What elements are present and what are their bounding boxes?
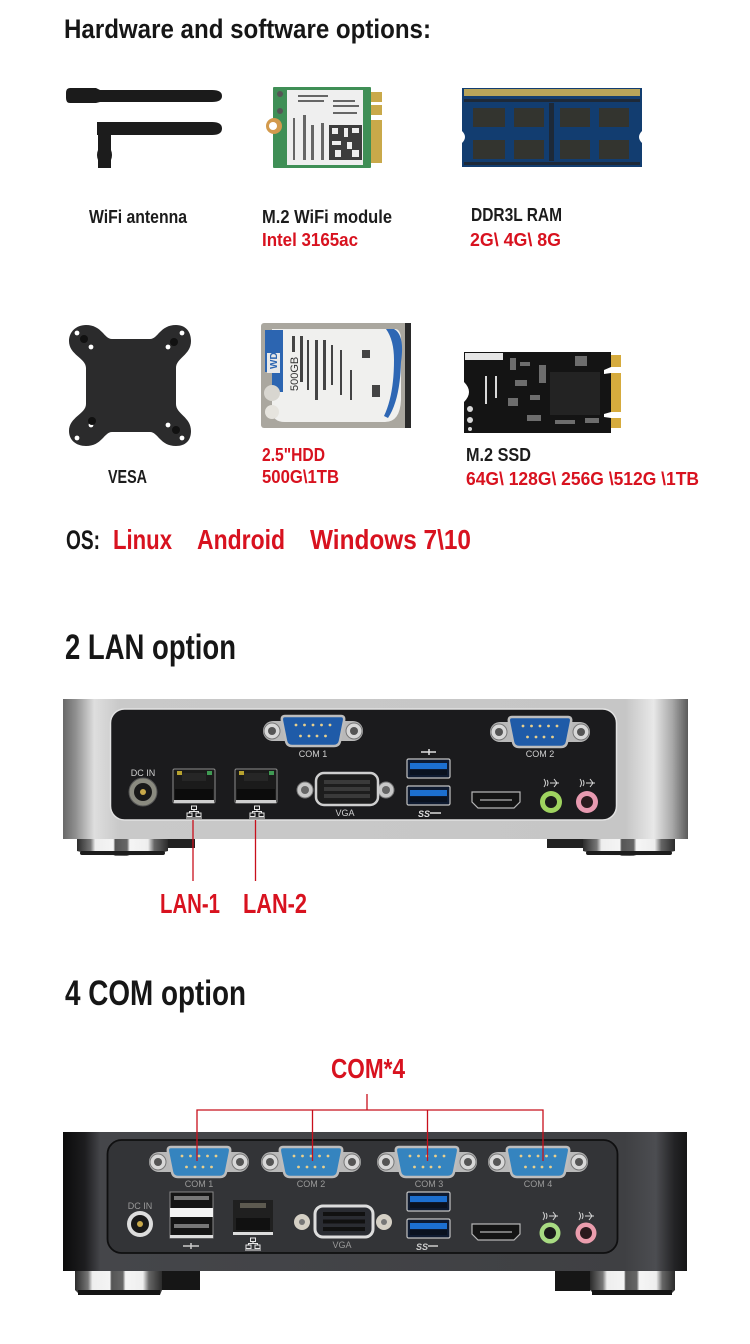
label: M.2 SSD: M.2 SSD [466, 445, 531, 465]
port: HDMI [472, 792, 520, 808]
device: silver mini PC with 2 LAN: COM 1 [299, 749, 327, 759]
label: WiFi antenna: WiFi antenna [89, 207, 188, 227]
rear panel [108, 1140, 618, 1253]
device: black mini PC with 4 COM: COM 3 [415, 1179, 443, 1189]
port: VGA: VGA [332, 1240, 352, 1250]
feet [75, 1271, 675, 1295]
port: COM 2 [261, 1147, 361, 1177]
label: LAN-1: LAN-1 [160, 888, 220, 919]
port: USB 3.0 pair: SS [418, 809, 430, 819]
device: black mini PC with 4 COM: COM 2 [297, 1179, 325, 1189]
text: operating systems [66, 524, 471, 555]
port: DC IN: DC IN [131, 768, 155, 778]
label: VESA: VESA [108, 467, 147, 487]
icon: 2.5 inch HDD [261, 323, 411, 428]
arrow: COM bracket lines [197, 1094, 543, 1161]
text: operating systems: OS: [66, 525, 100, 555]
port: VGA [297, 773, 394, 818]
port: VGA [294, 1206, 392, 1250]
icon: M.2 WiFi module [266, 87, 382, 168]
label: LAN-2: LAN-2 [243, 888, 307, 919]
port: audio green [540, 779, 562, 813]
body [63, 699, 688, 839]
title: hardware and software options: Hardware and software options: [64, 14, 431, 44]
port: LAN 2 [235, 769, 277, 818]
port: audio green [540, 1212, 560, 1244]
label: RAM sizes: 2G\ 4G\ 8G [470, 230, 561, 250]
label: COM*4: COM*4 [331, 1053, 405, 1084]
device: black mini PC with 4 COM: COM 4 [524, 1179, 552, 1189]
port: USB 3.0 pair [407, 1192, 450, 1252]
port: COM 4 [488, 1147, 588, 1177]
text: operating systems: Windows 7\10 [310, 524, 471, 555]
port: COM 1 [149, 1147, 249, 1177]
arrow: LAN-1 leader line [192, 820, 194, 881]
port: COM 3 [377, 1147, 477, 1177]
label: M.2 WiFi module: M.2 WiFi module [262, 207, 392, 227]
port: DC IN [127, 1201, 153, 1237]
label: DDR3L RAM: DDR3L RAM [471, 205, 562, 225]
port: COM 2 [490, 717, 590, 747]
icon: WiFi antenna [66, 88, 222, 168]
heading: 4 COM option: 4 COM option [65, 974, 246, 1013]
port: audio pink [576, 779, 598, 813]
rear panel [110, 709, 616, 820]
port: DC IN: DC IN [128, 1201, 152, 1211]
icon: 2.5 inch HDD: WD [269, 352, 280, 369]
icon: VESA plate [69, 325, 191, 446]
label: HDD sizes: 500G\1TB [262, 467, 339, 487]
feet [77, 839, 675, 856]
heading: 2 LAN option: 2 LAN option [65, 628, 236, 667]
port: COM 1 [263, 716, 363, 746]
icon: M.2 SSD [464, 352, 621, 433]
icon: DDR3L RAM [462, 88, 642, 167]
port: LAN [233, 1200, 273, 1250]
label: SSD sizes: 64G\ 128G\ 256G \512G \1TB [466, 469, 699, 489]
device: black mini PC with 4 COM: COM 1 [185, 1179, 213, 1189]
port: LAN 1 [173, 769, 215, 818]
arrow: LAN-2 leader line [254, 820, 256, 881]
device: black mini PC with 4 COM [63, 1132, 687, 1295]
port: USB 3.0 pair [407, 749, 450, 819]
device: silver mini PC with 2 LAN: COM 2 [526, 749, 554, 759]
port: HDMI [472, 1224, 520, 1240]
port: audio pink [576, 1212, 596, 1244]
port: DC IN [129, 768, 157, 806]
icon: 2.5 inch HDD: 500GB [289, 357, 301, 391]
text: operating systems: Linux [113, 524, 172, 555]
port: USB 2.0 stack [170, 1192, 213, 1249]
label: Intel 3165ac: Intel 3165ac [262, 230, 358, 250]
text: operating systems: Android [197, 524, 285, 555]
port: VGA: VGA [335, 808, 355, 818]
port: USB 3.0 pair: SS [416, 1242, 428, 1252]
label: 2.5 inch HDD: 2.5"HDD [262, 445, 325, 465]
device: silver mini PC with 2 LAN [63, 699, 688, 856]
body [63, 1132, 687, 1271]
